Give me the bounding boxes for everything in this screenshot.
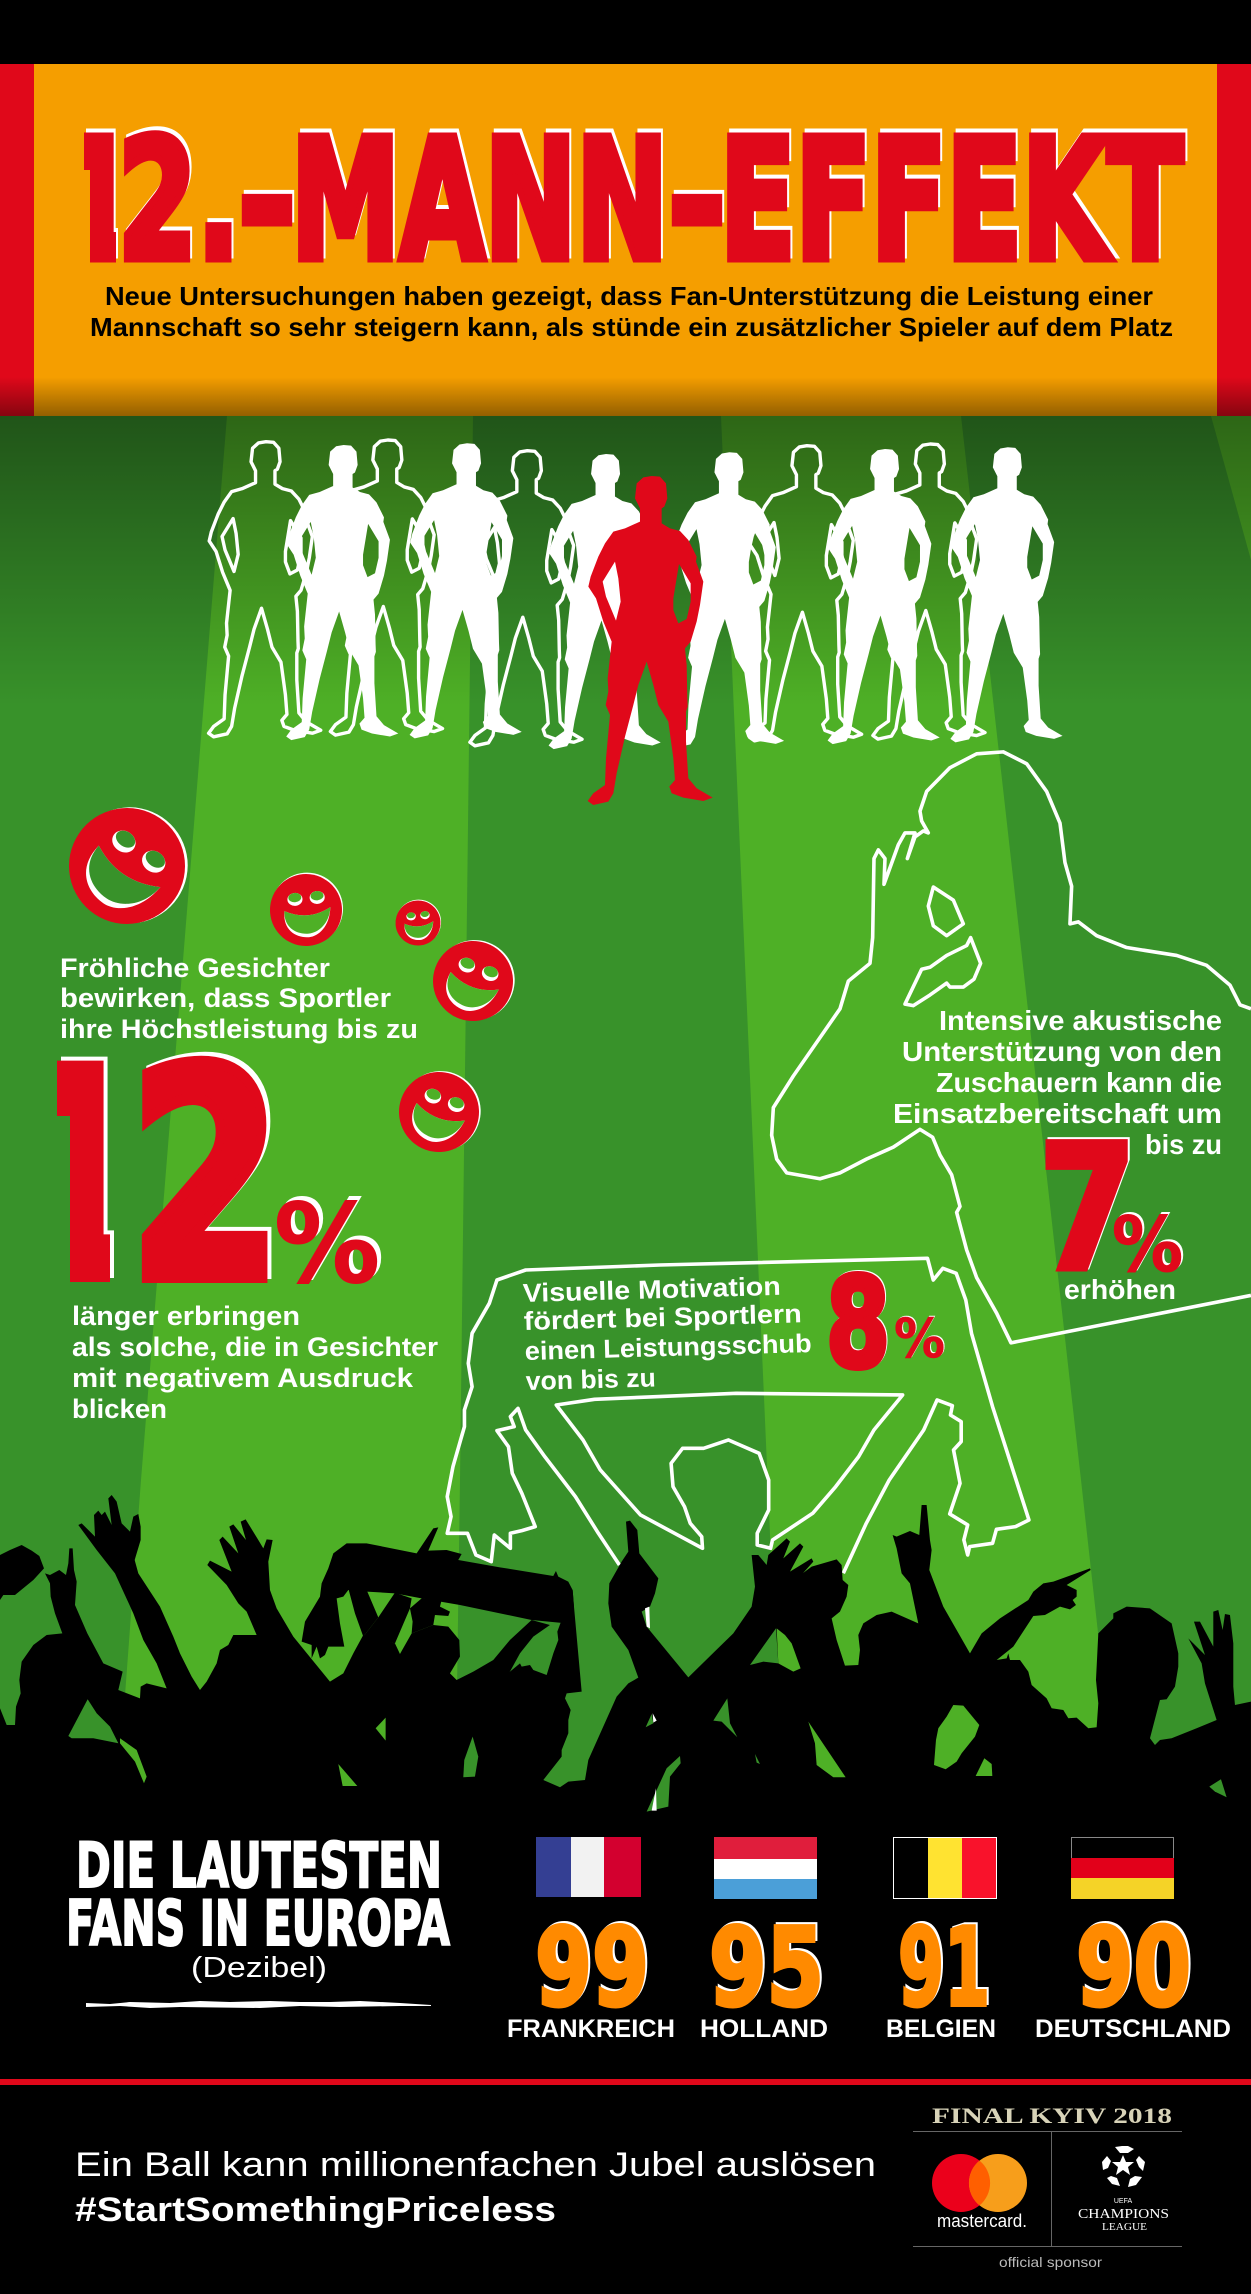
text: acoustic support: bis zu xyxy=(1145,1129,1222,1160)
title: - xyxy=(238,105,296,298)
icons: smileys xyxy=(46,784,526,1164)
chalk underline xyxy=(86,2001,431,2008)
text: acoustic support: Einsatzbereitschaft um xyxy=(893,1098,1222,1129)
heading: loudest fans xyxy=(66,1829,450,1984)
crowd middle part xyxy=(500,1505,970,1830)
crowd silhouette xyxy=(0,1495,1251,1830)
text: happy faces intro: ihre Höchstleistung bis zu xyxy=(60,1014,418,1044)
text: acoustic support xyxy=(893,1005,1222,1160)
text: happy faces intro: bewirken, dass Sportler xyxy=(60,983,392,1013)
flag: Germany xyxy=(1071,1838,1174,1899)
outlined players xyxy=(209,440,985,746)
filled white players xyxy=(286,443,1063,749)
logo: champions league: LEAGUE xyxy=(1102,2221,1147,2233)
crowd gaps right xyxy=(934,1705,1227,1797)
title: - xyxy=(668,105,726,298)
official sponsor: official sponsor xyxy=(999,2254,1102,2270)
number: Belgium 91: 91 xyxy=(898,1906,990,2031)
text: acoustic support: Intensive akustische xyxy=(939,1005,1222,1036)
panel: happy faces statistic xyxy=(57,807,515,1418)
players team silhouette xyxy=(209,440,1063,805)
heading: loudest fans: DIE LAUTESTEN xyxy=(76,1829,442,1902)
text: happy faces outro: mit negativem Ausdruck xyxy=(72,1363,414,1393)
text: visual motivation xyxy=(522,1271,812,1396)
number: 8 percent: % xyxy=(894,1307,945,1370)
panel: footer xyxy=(75,2103,1182,2270)
number: 7 percent: % xyxy=(1112,1200,1183,1289)
final heading: FINAL KYIV 2018 xyxy=(932,2103,1172,2128)
panel: acoustic support statistic xyxy=(772,752,1251,1343)
title: 2. xyxy=(118,105,240,298)
slogan xyxy=(75,2146,876,2229)
text: visual motivation: von bis zu xyxy=(525,1362,656,1396)
flag: Belgium xyxy=(894,1838,996,1898)
text: erhöhen: erhöhen xyxy=(1064,1274,1176,1305)
top black band xyxy=(0,0,1251,64)
panel: title banner xyxy=(0,64,1251,416)
crowd left part xyxy=(0,1495,574,1830)
logo: champions league: UEFA xyxy=(1114,2198,1132,2205)
subtitle: Neue Untersuchungen haben gezeigt, dass Fan-Unterstützung die Leistung einer xyxy=(105,281,1153,311)
number: France 99: 99 xyxy=(535,1906,649,2031)
text: visual motivation: Visuelle Motivation xyxy=(522,1271,781,1308)
number: Netherlands 95: 95 xyxy=(709,1906,824,2031)
text: happy faces outro: länger erbringen xyxy=(72,1301,300,1331)
text: happy faces outro: als solche, die in Gesichter xyxy=(72,1332,439,1362)
flag: Netherlands xyxy=(714,1837,817,1899)
number: 12 percent: 2 xyxy=(129,1009,282,1346)
text: visual motivation: einen Leistungsschub xyxy=(524,1328,812,1366)
logo: champions league xyxy=(1078,2146,1169,2233)
text: visual motivation: fördert bei Sportlern xyxy=(523,1298,802,1336)
text: happy faces outro: blicken xyxy=(72,1394,167,1424)
text: happy faces intro xyxy=(60,953,418,1044)
subtitle xyxy=(90,281,1173,342)
slogan: #StartSomethingPriceless xyxy=(75,2191,556,2229)
number: 12 percent xyxy=(57,1052,382,1284)
logo: mastercard xyxy=(932,2154,1027,2231)
heading: loudest fans: (Dezibel) xyxy=(191,1952,327,1984)
slogan: Ein Ball kann millionenfachen Jubel auslösen xyxy=(75,2146,876,2184)
title: MANN xyxy=(291,105,668,298)
crowd gaps left xyxy=(68,1699,478,1786)
title xyxy=(84,126,1188,262)
panel: loudest fans black section xyxy=(0,1829,1251,2294)
label: countries: BELGIEN xyxy=(886,2015,996,2043)
logo: champions league: CHAMPIONS xyxy=(1078,2207,1169,2222)
number: Germany 90: 90 xyxy=(1076,1906,1191,2031)
heading: loudest fans: FANS IN EUROPA xyxy=(66,1887,450,1960)
number: 8 percent: 8 xyxy=(826,1252,890,1396)
label: countries: FRANKREICH xyxy=(507,2015,675,2043)
cheering fan outline xyxy=(772,752,1251,1343)
label: countries: DEUTSCHLAND xyxy=(1035,2015,1231,2043)
number: 12 percent: % xyxy=(274,1180,380,1308)
text: happy faces intro: Fröhliche Gesichter xyxy=(60,953,331,983)
red divider xyxy=(0,2079,1251,2085)
label: countries: HOLLAND xyxy=(700,2015,828,2043)
label: countries xyxy=(507,2015,1231,2043)
text: acoustic support: Zuschauern kann die xyxy=(936,1067,1222,1098)
subtitle: Mannschaft so sehr steigern kann, als stünde ein zusätzlicher Spieler auf dem Platz xyxy=(90,312,1173,342)
crowd gaps middle xyxy=(645,1607,846,1812)
panel: green pitch background xyxy=(0,416,1251,1836)
scarf fan outline xyxy=(447,1258,1029,1573)
red twelfth man xyxy=(588,476,713,805)
text: happy faces outro xyxy=(72,1301,439,1424)
logo: mastercard: mastercard. xyxy=(937,2211,1027,2231)
panel: visual motivation statistic xyxy=(447,1252,1029,1573)
flag: France xyxy=(536,1837,641,1897)
crowd right part xyxy=(950,1568,1251,1830)
text: acoustic support: Unterstützung von den xyxy=(902,1036,1222,1067)
number: 7 percent: 7 xyxy=(1039,1108,1136,1309)
title: 1 xyxy=(26,105,151,298)
